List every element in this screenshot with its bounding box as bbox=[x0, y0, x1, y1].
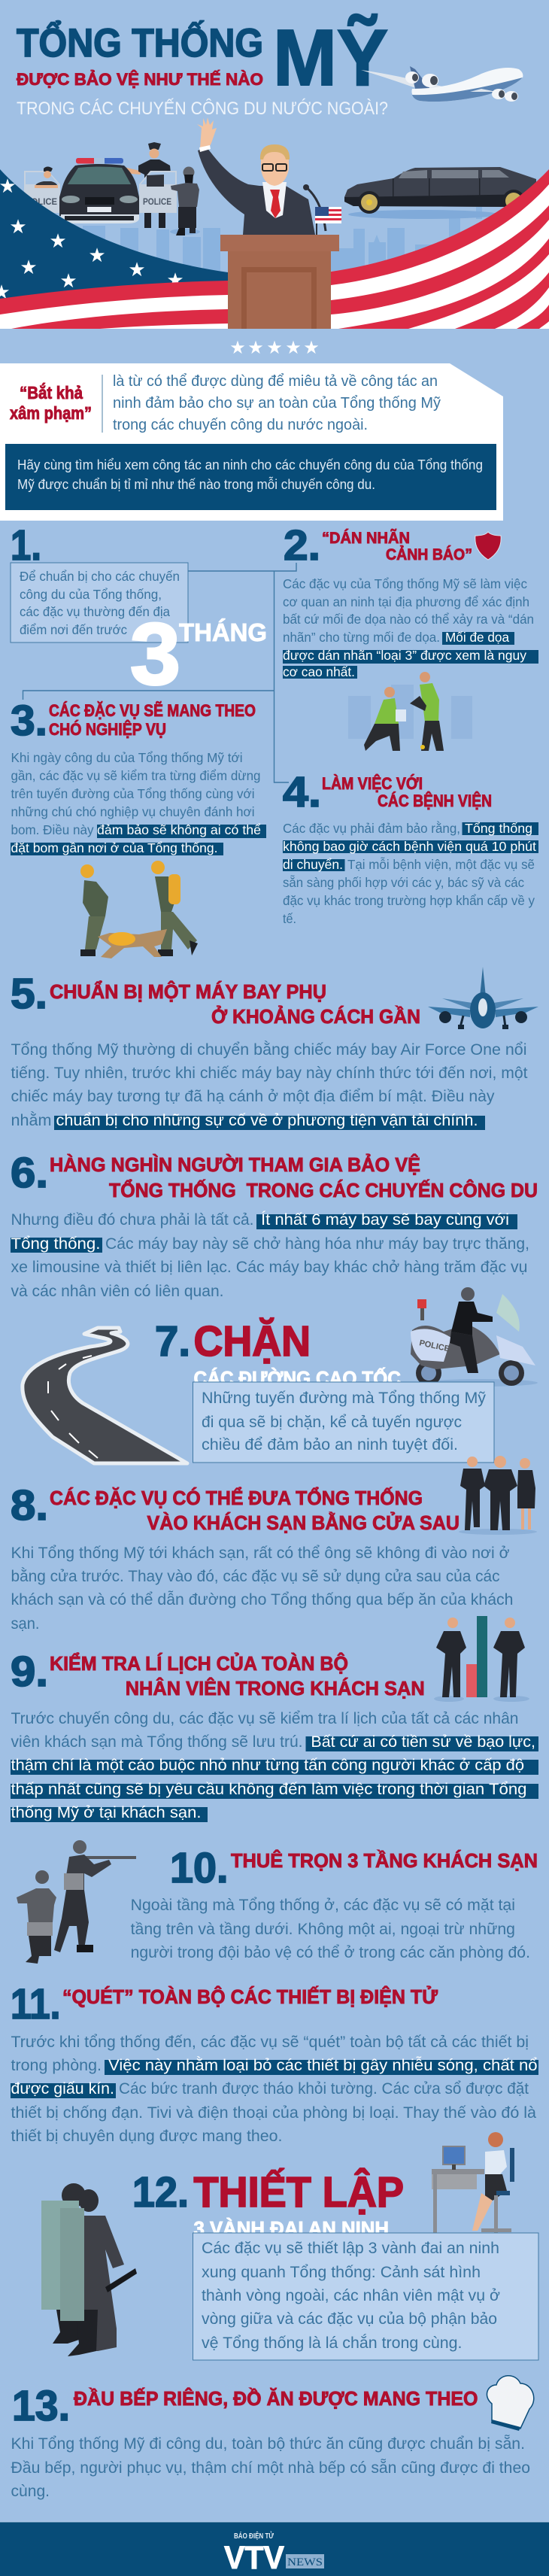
text box: đi qua sẽ bị chặn, kể cả tuyến ngược bbox=[202, 1414, 462, 1431]
text: đặc vụ khác trong trường hợp khẩn cấp về y bbox=[283, 893, 535, 908]
section 4 bbox=[283, 768, 538, 926]
icon: armed soldiers bbox=[17, 1840, 136, 1964]
text: tầng trên và tầng dưới. Không một ai, ngoại trừ những bbox=[131, 1921, 515, 1938]
text: Nhưng điều đó chưa phải là tất cả. bbox=[11, 1211, 254, 1229]
icon: police motorbike: POLICE bbox=[418, 1338, 450, 1353]
section 7 bbox=[23, 1287, 538, 1463]
icon: riot guard with shield bbox=[41, 2183, 137, 2356]
icon: agents and bars bbox=[434, 1616, 529, 1702]
decorative five stars: ★ bbox=[266, 338, 283, 358]
number 6: 6. bbox=[11, 1149, 48, 1197]
text: Khi ngày công du của Tổng thống Mỹ tới bbox=[11, 750, 242, 765]
text box: xung quanh Tổng thống: Cảnh sát hình bbox=[202, 2264, 481, 2281]
heading bbox=[50, 1487, 460, 1534]
number 12 and heading: 12. bbox=[132, 2168, 189, 2216]
number 7 and heading: 7. bbox=[155, 1317, 190, 1365]
icon: american flag background: ★ bbox=[49, 229, 67, 252]
number 12 and heading bbox=[132, 2167, 404, 2240]
number 7 and heading: CÁC ĐƯỜNG CAO TỐC bbox=[194, 1367, 401, 1390]
text: di chuyển. bbox=[283, 857, 343, 872]
text box: Các đặc vụ sẽ thiết lập 3 vành đai an ninh bbox=[202, 2240, 499, 2257]
heading: HÀNG NGHÌN NGƯỜI THAM GIA BẢO VỆ bbox=[50, 1153, 420, 1176]
logo: VTV News: BÁO ĐIỆN TỬ bbox=[234, 2531, 274, 2541]
heading: THUÊ TRỌN 3 TẦNG KHÁCH SẠN bbox=[231, 1849, 538, 1872]
text: trong phòng. bbox=[11, 2057, 102, 2074]
icon: american flag background: ★ bbox=[128, 258, 146, 281]
text: chiếc máy bay tương tự đã hạ cánh ở một địa điểm bí mật. Điều này bbox=[11, 1088, 495, 1105]
section 1 bbox=[11, 521, 267, 703]
number 10: 10. bbox=[170, 1844, 229, 1892]
section 10 bbox=[17, 1840, 538, 1964]
heading: CHUẨN BỊ MỘT MÁY BAY PHỤ bbox=[50, 980, 326, 1003]
heading bbox=[322, 530, 472, 564]
text: Tại mỗi bệnh viện, một đặc vụ sẽ bbox=[347, 856, 535, 872]
text bbox=[11, 1710, 538, 1822]
text: viên khách sạn mà Tổng thống sẽ lưu trú. bbox=[11, 1733, 303, 1751]
heading: “DÁN NHÃN bbox=[322, 530, 410, 547]
quote heading bbox=[10, 382, 92, 423]
number 5: 5. bbox=[11, 970, 47, 1018]
text: Bất cứ ai có tiền sử về bạo lực, bbox=[311, 1733, 535, 1751]
text: đặt bom gần nơi ở của Tổng thống. bbox=[11, 840, 218, 855]
icon: shield bbox=[475, 532, 501, 560]
text: bằng cửa trước. Thay vào đó, các đặc vụ sẽ sử dụng cửa sau của các bbox=[11, 1568, 499, 1585]
section 3 bbox=[11, 697, 266, 958]
text: Trước khi tổng thống đến, các đặc vụ sẽ “quét” toàn bộ tất cả các thiết bị bbox=[11, 2034, 529, 2051]
icon: three agents bbox=[459, 1456, 537, 1535]
section 2 bbox=[283, 521, 538, 751]
text: Mối đe dọa bbox=[445, 630, 509, 645]
text: không bao giờ cách bệnh viện quá 10 phút bbox=[283, 839, 536, 854]
text box: công du của Tổng thống, bbox=[20, 587, 162, 602]
number 2: 2. bbox=[284, 521, 320, 570]
intro callout: Mỹ được chuẩn bị tỉ mỉ như thế nào trong mỗi chuyến công du. bbox=[17, 476, 375, 492]
heading: TỔNG THỐNG TRONG CÁC CHUYẾN CÔNG DU bbox=[109, 1179, 538, 1201]
text: đảm bảo sẽ không ai có thể bbox=[97, 822, 261, 837]
number 11: 11. bbox=[11, 1980, 60, 2028]
text: tế. bbox=[283, 911, 296, 926]
text: bom. Điều này bbox=[11, 822, 94, 837]
heading: Ở KHOẢNG CÁCH GẦN bbox=[211, 1004, 420, 1028]
quote heading: xâm phạm” bbox=[10, 403, 92, 423]
logo: VTV News: VTV bbox=[224, 2540, 284, 2576]
icon: police car bbox=[24, 158, 177, 223]
text: Ngoài tầng mà Tổng thống ở, các đặc vụ sẽ có mặt tại bbox=[131, 1897, 515, 1914]
text bbox=[11, 750, 266, 855]
section 5 bbox=[11, 967, 538, 1130]
text bbox=[11, 1041, 528, 1130]
text box: điểm nơi đến trước bbox=[20, 622, 127, 637]
text: nhãn” cho từng mối đe dọa. bbox=[283, 630, 440, 645]
icon: police motorbike bbox=[411, 1287, 538, 1387]
text: Tổng thống. bbox=[11, 1235, 101, 1253]
section 8 bbox=[11, 1456, 537, 1633]
icon: soldiers and sniffer dog bbox=[80, 861, 198, 958]
text box bbox=[193, 1382, 494, 1463]
text: được giấu kín. bbox=[11, 2080, 114, 2098]
logo: VTV News: NEWS bbox=[287, 2556, 323, 2568]
intro text: ninh đảm bảo cho sự an toàn của Tổng thống Mỹ bbox=[113, 395, 441, 412]
icon: american flag background: ★ bbox=[59, 269, 77, 292]
text box: thành vòng ngoài, các nhân viên mật vụ ở bbox=[202, 2287, 500, 2304]
heading bbox=[49, 701, 256, 739]
text box: vệ Tổng thống là lá chắn trong cùng. bbox=[202, 2334, 462, 2352]
heading: CHÓ NGHIỆP VỤ bbox=[49, 720, 166, 739]
icon: police car: POLICE bbox=[26, 196, 57, 207]
heading bbox=[50, 1153, 538, 1201]
icon: waving president bbox=[197, 117, 315, 235]
number 13: 13. bbox=[12, 2382, 70, 2430]
heading bbox=[322, 774, 492, 810]
section 9 bbox=[11, 1616, 538, 1822]
text box: vòng giữa và các đặc vụ của bộ phận bảo bbox=[202, 2310, 497, 2328]
text: chuẩn bị cho những sự cố về ở phương tiện vận tải chính. bbox=[56, 1112, 478, 1129]
icon: american flag background bbox=[0, 169, 549, 329]
icon: chef hat bbox=[487, 2376, 534, 2431]
icon: airplane bbox=[361, 66, 538, 102]
title: TRONG CÁC CHUYẾN CÔNG DU NƯỚC NGOÀI? bbox=[17, 98, 388, 119]
icon: american flag background: ★ bbox=[9, 215, 27, 238]
logo: VTV News bbox=[224, 2531, 324, 2576]
intro callout: Hãy cùng tìm hiểu xem công tác an ninh cho các chuyến công du của Tổng thống bbox=[17, 457, 483, 472]
icon: masked soldier bbox=[170, 167, 200, 235]
decorative five stars: ★ bbox=[285, 338, 302, 358]
text: cùng. bbox=[11, 2483, 50, 2500]
intro text: là từ có thể được dùng để miêu tả về công tác an bbox=[113, 373, 438, 390]
text: và các nhân viên có liên quan. bbox=[11, 1283, 224, 1300]
text: Các bức tranh được tháo khỏi tường. Các cửa sổ được đặt bbox=[119, 2080, 529, 2098]
heading: ĐẦU BẾP RIÊNG, ĐỒ ĂN ĐƯỢC MANG THEO bbox=[74, 2387, 478, 2410]
text: tiếng. Tuy nhiên, trước khi chiếc máy bay này chính thức tới đến nơi, một bbox=[11, 1065, 528, 1082]
panel: intro bbox=[0, 363, 503, 521]
section 13 bbox=[11, 2376, 534, 2500]
intro text: trong các chuyến công du nước ngoài. bbox=[113, 417, 368, 433]
text: cơ quan an ninh tại địa phương để xác định bbox=[283, 594, 529, 609]
text: Các đặc vụ phải đảm bảo rằng, bbox=[283, 820, 460, 836]
text: thiết bị chuyên dụng được mang theo. bbox=[11, 2128, 283, 2145]
text box: chiều để đảm bảo an ninh tuyệt đối. bbox=[202, 1436, 458, 1454]
heading: CÁC ĐẶC VỤ SẼ MANG THEO bbox=[49, 701, 256, 720]
icon: podium bbox=[220, 235, 339, 329]
icon: police car: POLICE bbox=[143, 196, 171, 207]
heading bbox=[50, 980, 420, 1028]
title: MỸ bbox=[273, 14, 388, 102]
number 12 and heading: THIẾT LẬP bbox=[194, 2167, 404, 2216]
text box: Để chuẩn bị cho các chuyến bbox=[20, 569, 180, 584]
text: Ít nhất 6 máy bay sẽ bay cùng với bbox=[261, 1211, 509, 1229]
section 11 bbox=[11, 1980, 538, 2145]
number 4: 4. bbox=[283, 768, 321, 816]
text: Trước chuyến công du, các đặc vụ sẽ kiểm tra lí lịch của tất cả các nhân bbox=[11, 1710, 519, 1727]
intro callout bbox=[5, 444, 496, 510]
text: Các đặc vụ của Tổng thống Mỹ sẽ làm việc bbox=[283, 576, 527, 591]
text: thậm chí là một cáo buộc nhỏ như từng tấn công người khác ở cấp độ bbox=[11, 1757, 524, 1774]
text: xe limousine và thiết bị liên lạc. Các máy bay khác chở hàng trăm đặc vụ bbox=[11, 1259, 528, 1276]
text: sạn. bbox=[11, 1615, 39, 1633]
section 6 bbox=[11, 1149, 538, 1300]
text bbox=[283, 576, 538, 679]
text bbox=[11, 1545, 513, 1633]
number 7 and heading bbox=[155, 1317, 401, 1390]
text bbox=[11, 1211, 529, 1300]
heading: CÁC ĐẶC VỤ CÓ THỂ ĐƯA TỔNG THỐNG bbox=[50, 1487, 423, 1509]
text box: các đặc vụ thường đến địa bbox=[20, 604, 170, 619]
text: sẵn sàng phối hợp với các y, bác sỹ và các bbox=[283, 875, 524, 890]
icon: airplane front bbox=[428, 967, 538, 1029]
text box bbox=[193, 2233, 538, 2360]
number 9: 9. bbox=[11, 1648, 48, 1696]
heading: KIỂM TRA LÍ LỊCH CỦA TOÀN BỘ bbox=[50, 1651, 348, 1675]
text: Các máy bay này sẽ chở hàng hóa như máy bay trực thăng, bbox=[105, 1235, 529, 1253]
heading bbox=[50, 1651, 425, 1700]
text: Khi Tổng thống Mỹ tới khách sạn, rất có thể ông sẽ không đi vào nơi ở bbox=[11, 1545, 510, 1562]
text: gần, các đặc vụ sẽ kiểm tra từng điểm dừng bbox=[11, 768, 260, 783]
text: thiết bị chống đạn. Tivi và điện thoại của phòng bị loại. Thay thế vào đó là bbox=[11, 2104, 536, 2122]
icon: winding road bbox=[23, 1328, 187, 1463]
text: Khi Tổng thống Mỹ đi công du, toàn bộ thức ăn cũng được chuẩn bị sẵn. bbox=[11, 2435, 525, 2453]
text bbox=[11, 2435, 530, 2500]
icon: limousine bbox=[344, 167, 536, 219]
number 8: 8. bbox=[11, 1481, 48, 1530]
heading: LÀM VIỆC VỚI bbox=[322, 774, 423, 793]
heading: “QUÉT” TOÀN BỘ CÁC THIẾT BỊ ĐIỆN TỬ bbox=[62, 1985, 438, 2008]
number 7 and heading: CHẶN bbox=[194, 1317, 311, 1365]
big 3 months: THÁNG bbox=[179, 618, 267, 646]
text: khách sạn và có thể dẫn đường cho Tổng thống qua bếp ăn của khách bbox=[11, 1591, 513, 1608]
number 12 and heading: 3 VÀNH ĐAI AN NINH bbox=[194, 2217, 389, 2240]
decorative five stars: ★ bbox=[303, 338, 320, 358]
number 1: 1. bbox=[11, 521, 41, 570]
text: người trong đội bảo vệ có thể ở trong các căn phòng đó. bbox=[131, 1944, 530, 1961]
text: thấp nhất cũng sẽ bị yêu cầu không đến làm việc trong thời gian Tổng bbox=[11, 1781, 526, 1798]
intro text bbox=[113, 373, 441, 433]
icon: american flag background: ★ bbox=[166, 269, 184, 291]
text: những chú chó nghiệp vụ chuyên đánh hơi bbox=[11, 804, 254, 819]
connector lines bbox=[23, 563, 296, 782]
text: Đầu bếp, người phục vụ, thậm chí một nhà bếp có sẵn cũng được đi theo bbox=[11, 2459, 530, 2477]
text: Tổng thống Mỹ thường di chuyển bằng chiếc máy bay Air Force One nổi bbox=[11, 1041, 526, 1059]
section 12 bbox=[41, 2132, 538, 2360]
decorative five stars: ★ bbox=[229, 338, 246, 358]
icon: agents inspecting bbox=[348, 672, 472, 751]
title bbox=[17, 14, 388, 119]
text: trên tuyến đường của Tổng thống cùng với bbox=[11, 786, 254, 801]
icon: microphone and small flag bbox=[303, 184, 341, 235]
icon: operator at computer bbox=[432, 2132, 514, 2233]
icon: american flag background: ★ bbox=[88, 244, 106, 266]
icon: american flag background: ★ bbox=[20, 256, 38, 278]
text: bất cứ mối đe dọa nào có thể xảy ra và “dán bbox=[283, 612, 534, 627]
footer bbox=[0, 2522, 549, 2576]
text bbox=[283, 820, 538, 926]
text box: Những tuyến đường mà Tổng thống Mỹ bbox=[202, 1390, 487, 1407]
heading: VÀO KHÁCH SẠN BẰNG CỬA SAU bbox=[147, 1511, 460, 1534]
text: thống Mỹ ở tại khách sạn. bbox=[11, 1804, 202, 1821]
text: nhằm bbox=[11, 1112, 51, 1129]
text: được dán nhãn “loại 3” được xem là nguy bbox=[283, 648, 526, 663]
text: cơ cao nhất. bbox=[283, 664, 355, 679]
heading: CẢNH BÁO” bbox=[386, 546, 472, 564]
title: ĐƯỢC BẢO VỆ NHƯ THẾ NÀO bbox=[17, 70, 263, 89]
heading: CÁC BỆNH VIỆN bbox=[378, 791, 492, 810]
text bbox=[11, 2034, 538, 2145]
icon: police officer bbox=[120, 142, 171, 228]
text: Tổng thống bbox=[465, 821, 532, 836]
number 3: 3. bbox=[11, 697, 47, 745]
text box bbox=[11, 563, 188, 642]
title: TỔNG THỐNG bbox=[17, 20, 263, 65]
text: Việc này nhằm loại bỏ các thiết bị gây nhiễu sóng, chất nổ bbox=[108, 2057, 538, 2074]
big 3 months bbox=[130, 605, 267, 703]
heading: NHÂN VIÊN TRONG KHÁCH SẠN bbox=[126, 1677, 425, 1700]
skyline bbox=[83, 207, 482, 277]
decorative five stars bbox=[229, 338, 320, 358]
big 3 months: 3 bbox=[130, 605, 180, 703]
quote heading: “Bắt khả bbox=[20, 382, 83, 402]
decorative five stars: ★ bbox=[247, 338, 264, 358]
hero: title and illustration bbox=[0, 14, 549, 329]
text bbox=[131, 1897, 530, 1961]
